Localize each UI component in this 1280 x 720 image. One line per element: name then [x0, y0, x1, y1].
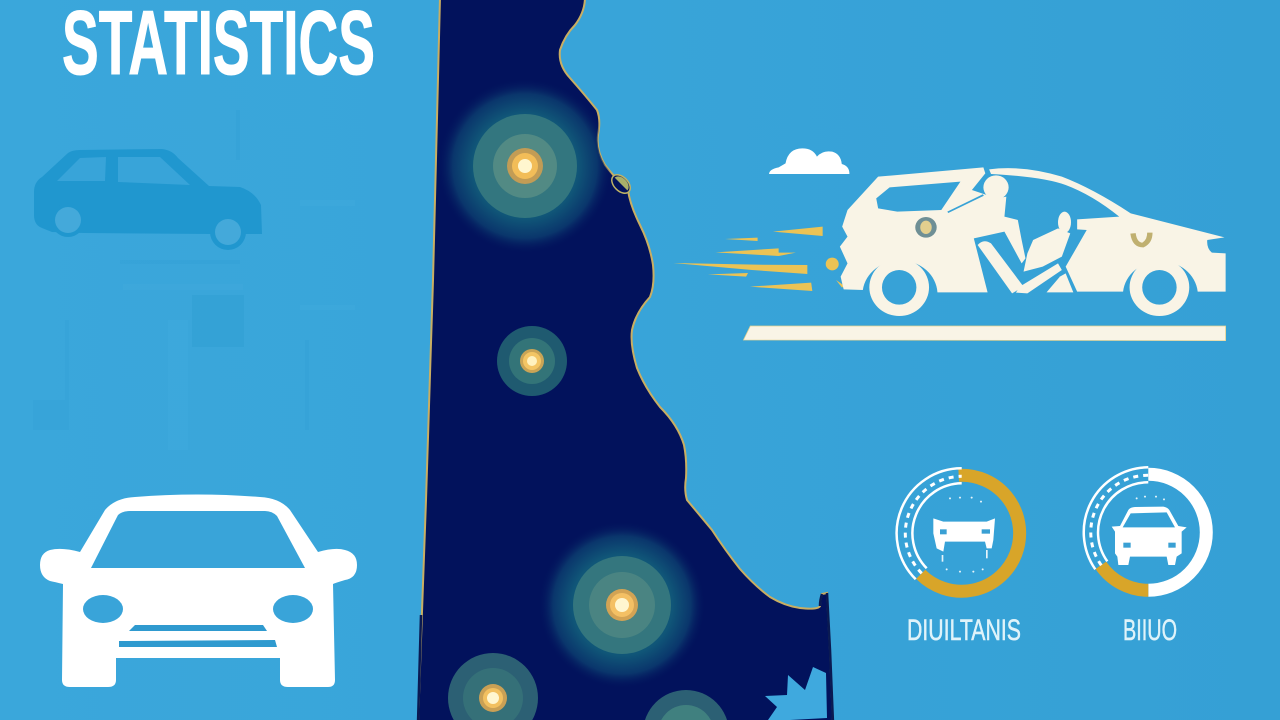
- door emblem rear: [1133, 233, 1150, 245]
- map detail: coastal cutout: [765, 667, 827, 720]
- road arc: [1084, 467, 1148, 569]
- windshield crack line: [948, 195, 983, 212]
- front wheel: [869, 259, 929, 316]
- map marker: northern hotspot: [444, 86, 612, 246]
- map marker: southern hotspot: [538, 521, 706, 689]
- donut chart: right: [1084, 467, 1206, 590]
- map marker: south-west hotspot: [448, 653, 538, 720]
- car icon: [1112, 496, 1187, 565]
- rear wheel: [1130, 259, 1189, 316]
- map detail: small island: [608, 171, 634, 197]
- gold progress arc: [921, 475, 1020, 591]
- label: left donut: DIUILTANIS: [907, 614, 1021, 647]
- donut chart: left: [897, 468, 1020, 591]
- gold arc: [1101, 565, 1148, 590]
- car body: [840, 167, 1226, 293]
- car icon: [933, 497, 995, 573]
- door emblem front: [915, 217, 937, 238]
- white arc: [1148, 474, 1206, 590]
- map marker: central hotspot: [497, 326, 567, 396]
- map of Delaware: [418, 0, 833, 720]
- speed lines: [673, 227, 846, 291]
- icon: faded side-view car: [34, 149, 262, 250]
- icon: crashed car with occupants: [673, 148, 1226, 341]
- cloud: [769, 148, 849, 174]
- road arc: [897, 468, 962, 579]
- label: right donut: BIIUO: [1123, 614, 1177, 647]
- map marker: bottom hotspot: [643, 690, 729, 720]
- icon: white front-view car: [40, 494, 357, 687]
- road strip: [743, 326, 1226, 341]
